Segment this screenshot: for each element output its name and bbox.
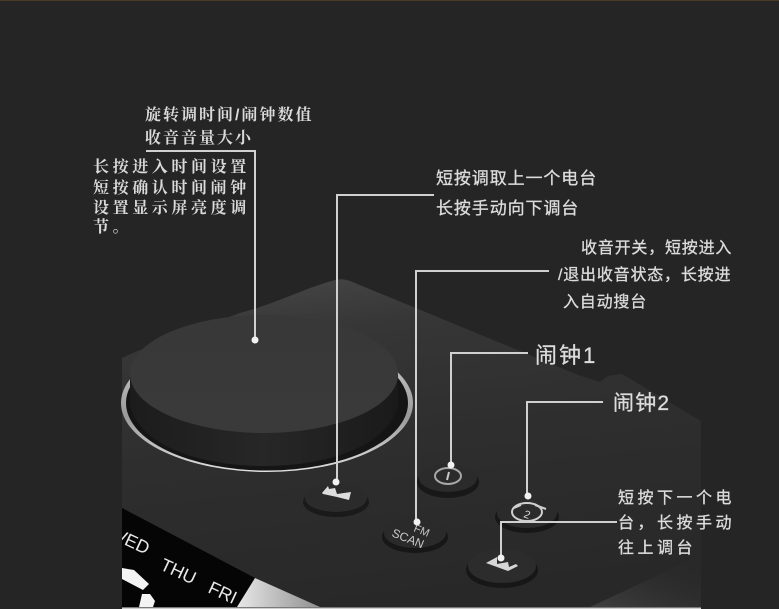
- icon: fast forward: [486, 557, 518, 571]
- text: previous station: [436, 169, 597, 218]
- text: radio switch: [558, 239, 732, 311]
- knob side: [130, 374, 398, 466]
- text: knob press: [93, 157, 250, 236]
- silver display edge: [237, 578, 320, 607]
- weekday labels: WED: [106, 522, 153, 558]
- knob top: [130, 315, 398, 433]
- digit segments: [122, 568, 149, 590]
- text: previous station: 长按手动向下调台: [436, 199, 579, 218]
- text: radio switch: 收音开关，短按进入: [581, 239, 732, 257]
- text: knob rotation: 旋转调时间/闹钟数值: [145, 105, 313, 124]
- button: previous station: [303, 484, 369, 517]
- chrome ring: [121, 334, 413, 472]
- label: alarm 1: 闹钟1: [535, 343, 597, 368]
- weekday labels: FRI: [205, 577, 240, 608]
- text: knob press: 设置显示屏亮度调: [93, 198, 250, 217]
- text: next station: 往上调台: [618, 539, 696, 557]
- device body: [122, 279, 701, 607]
- text: previous station: 短按调取上一个电台: [436, 169, 597, 188]
- leader line: knob: [146, 151, 258, 344]
- button: FM scan: [382, 518, 448, 553]
- button text: FM: [412, 523, 431, 540]
- button: alarm 2: [495, 498, 559, 533]
- text: knob press: 节。: [93, 217, 132, 236]
- leader line: FM scan: [414, 271, 549, 526]
- label: alarm 2: 闹钟2: [613, 392, 670, 415]
- bottom light edge: [122, 608, 701, 609]
- button: next station: [466, 549, 538, 588]
- text: radio switch: /退出收音状态，长按进: [558, 266, 731, 284]
- top edge strip: [0, 0, 779, 1]
- glossy bottom right highlight: [590, 555, 701, 607]
- button text: SCAN: [390, 526, 426, 551]
- text: next station: [618, 489, 735, 557]
- text: next station: 台，长按手动: [618, 514, 735, 532]
- leader line: alarm 2: [524, 402, 603, 500]
- icon: rewind: [322, 486, 351, 500]
- icon: alarm clock 1: [435, 468, 461, 484]
- leader line: alarm 1: [448, 353, 528, 468]
- leader line: previous station: [332, 195, 434, 486]
- tuning knob: [121, 315, 413, 472]
- text: next station: 短按下一个电: [618, 489, 735, 507]
- display panel: [106, 508, 320, 608]
- text: knob press: 短按确认时间闹钟: [93, 178, 250, 197]
- leader line: next station: [498, 522, 617, 562]
- weekday labels: THU: [157, 554, 199, 588]
- text: radio switch: 入自动搜台: [563, 293, 647, 311]
- button: alarm 1: [417, 464, 479, 498]
- icon: alarm clock 2: 2: [522, 509, 532, 522]
- text: knob rotation: [145, 105, 313, 147]
- weekday labels: [122, 532, 237, 604]
- text: knob press: 长按进入时间设置: [93, 157, 250, 176]
- text: knob rotation: 收音音量大小: [145, 129, 253, 147]
